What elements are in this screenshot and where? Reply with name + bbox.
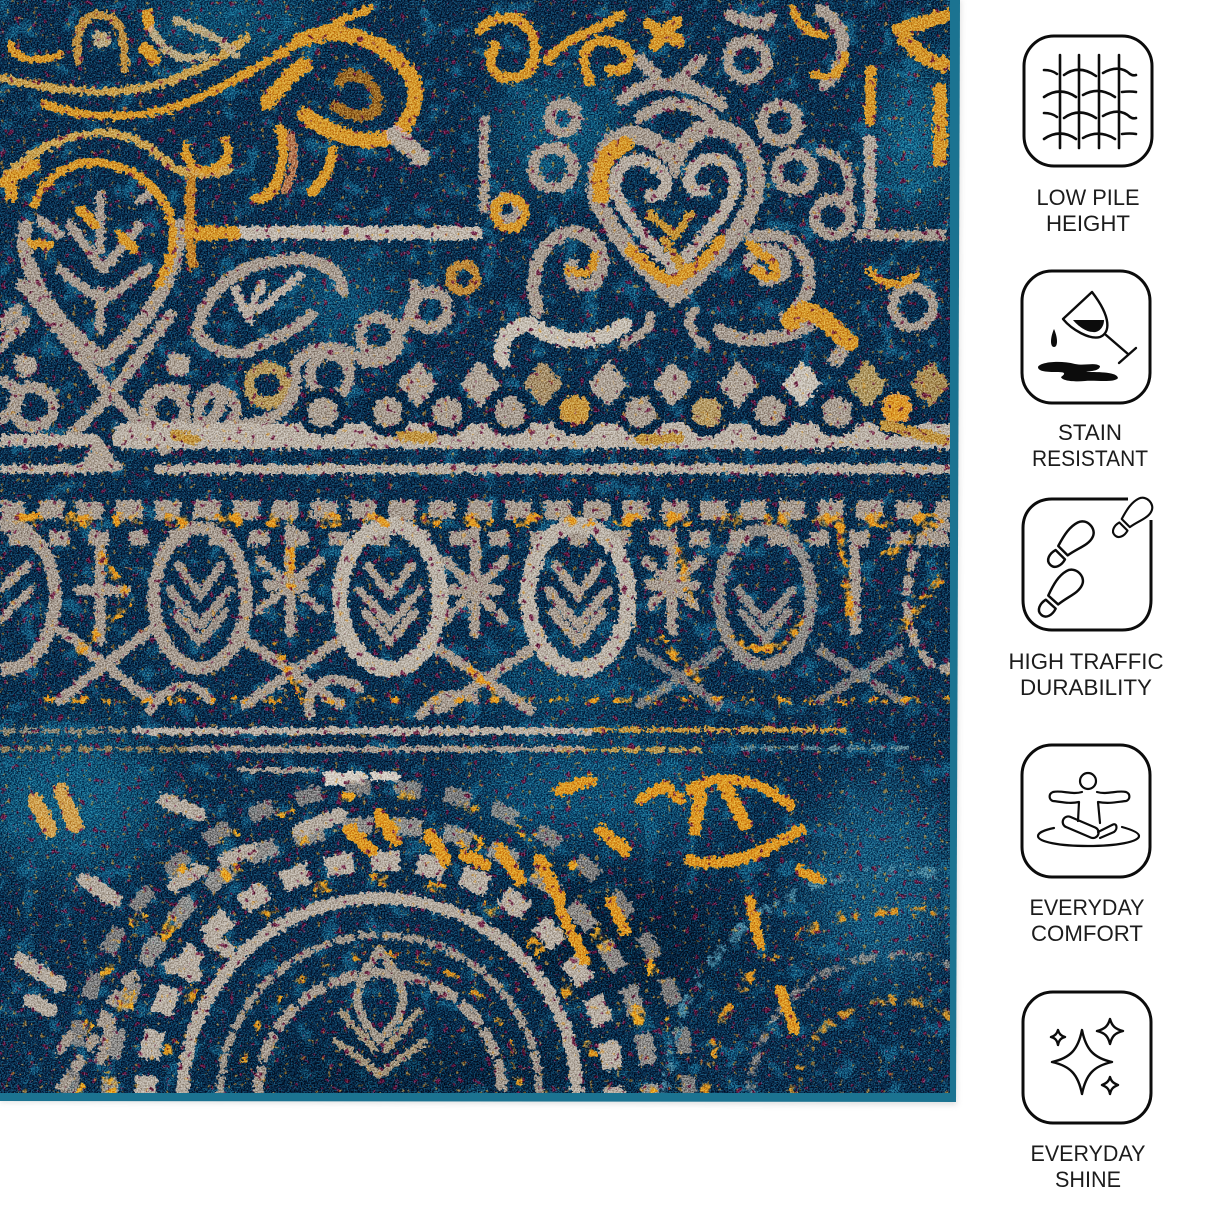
bead row — [15, 354, 948, 470]
label: low pile height: HEIGHT — [1046, 211, 1130, 236]
label: high traffic durability — [1008, 649, 1164, 700]
lower border band — [125, 424, 950, 448]
label: stain resistant: STAIN — [1058, 420, 1122, 445]
horizontal stripes — [0, 730, 910, 778]
gold flecks — [0, 640, 950, 1093]
label: stain resistant — [1032, 420, 1148, 471]
icon: low pile height — [1024, 36, 1152, 166]
pile grain overlay — [0, 0, 950, 1093]
bottom semicircular medallion — [60, 787, 688, 1095]
label: everyday comfort — [1030, 895, 1144, 946]
upper ornament, gold threads — [0, 8, 945, 440]
medallion 5, left edge — [0, 525, 983, 669]
gold blob at right scroll — [790, 311, 850, 342]
label: everyday shine — [1030, 1141, 1146, 1192]
top medallion arcs — [0, 8, 370, 116]
heart motif — [596, 128, 757, 296]
interstitial flourishes — [60, 530, 855, 715]
label: everyday comfort: COMFORT — [1031, 921, 1143, 946]
label: everyday comfort: EVERYDAY — [1030, 895, 1144, 920]
label: low pile height: LOW PILE — [1036, 185, 1140, 210]
crest blobs — [0, 510, 950, 538]
icon: stain resistant — [1022, 271, 1150, 403]
leaf motif — [197, 259, 342, 353]
gold flower motif — [255, 34, 420, 199]
label: stain resistant: RESISTANT — [1032, 446, 1148, 471]
scroll chain — [145, 265, 476, 429]
upper ornament, taupe threads — [0, 10, 950, 469]
medallion gold flecks — [0, 520, 950, 700]
rug field and pattern — [0, 0, 983, 1100]
medallion 3 — [528, 525, 628, 669]
medallion 1 — [154, 528, 246, 668]
upper right gold cluster — [35, 779, 820, 1030]
bottom medallion gold segments — [80, 795, 680, 1095]
heart gold accents — [568, 145, 776, 281]
top right gold scrolls — [480, 8, 945, 284]
rug binding edge — [0, 0, 961, 1105]
label: everyday shine: EVERYDAY — [1030, 1141, 1146, 1166]
medallion 4 — [719, 529, 811, 665]
paisley motif — [0, 190, 180, 450]
rug photograph — [0, 0, 983, 1105]
icon: everyday shine — [1023, 992, 1151, 1123]
large scrolls around heart — [495, 10, 933, 360]
label: everyday shine: SHINE — [1055, 1167, 1121, 1192]
medallion 2 — [340, 525, 440, 669]
left mottled blobs — [20, 800, 340, 1060]
horizontal rail — [235, 227, 475, 239]
icon: everyday comfort — [1022, 745, 1150, 877]
label: high traffic durability: HIGH TRAFFIC — [1008, 649, 1164, 674]
label: low pile height — [1036, 185, 1140, 236]
bottom right fan — [665, 870, 950, 1100]
paisley gold outline — [0, 129, 232, 285]
maroon and magenta flecks — [0, 660, 950, 1093]
icon: high traffic durability — [1023, 494, 1156, 630]
band of medallions — [0, 510, 983, 715]
label: high traffic durability: DURABILITY — [1020, 675, 1152, 700]
